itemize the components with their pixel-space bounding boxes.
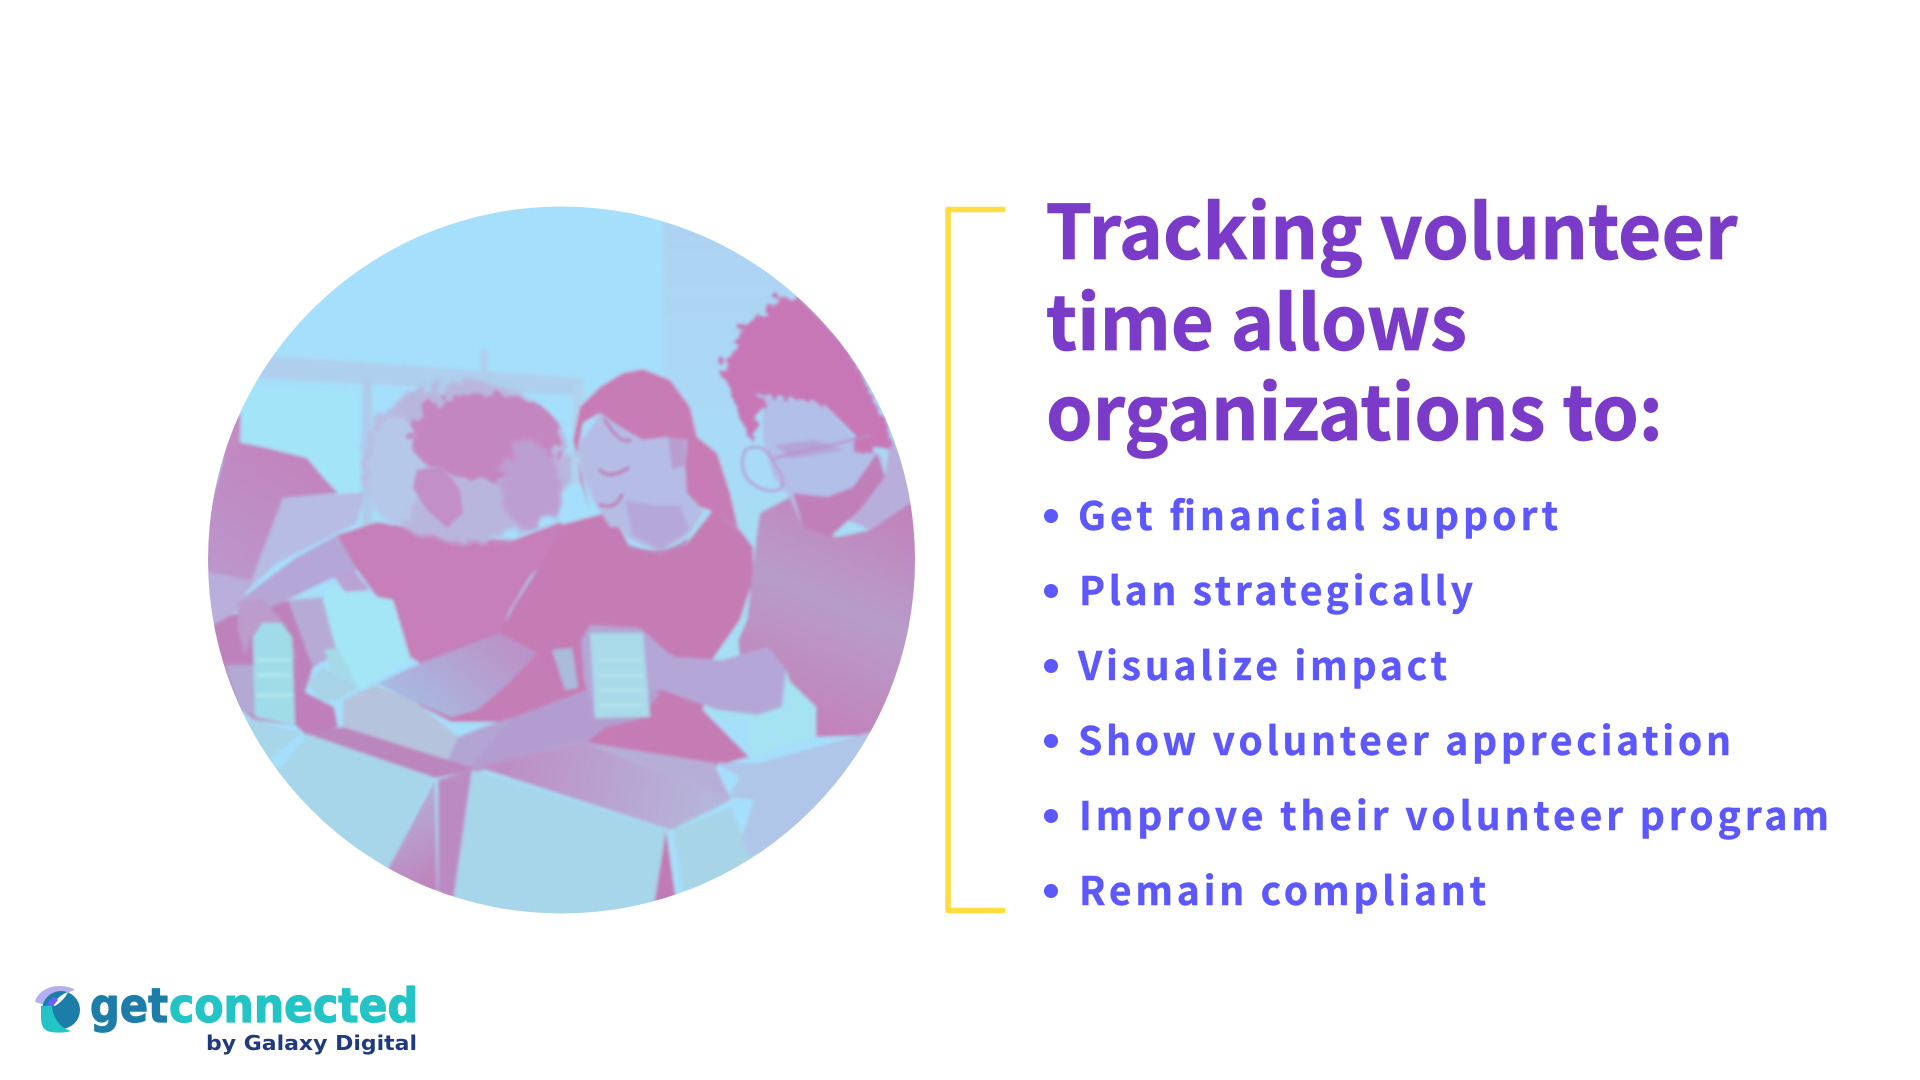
tagline: by Galaxy Digital — [206, 1031, 417, 1055]
bullet list — [1044, 486, 1829, 917]
hand on box — [715, 730, 871, 856]
item: get financial support: Get financial support — [1078, 486, 1558, 542]
logo: getconnected by Galaxy Digital — [35, 979, 418, 1055]
man right forearm — [659, 647, 788, 716]
clipboard — [248, 492, 365, 590]
heading — [1046, 172, 1738, 462]
man left shirt — [208, 441, 338, 591]
gap under arm — [552, 648, 578, 690]
woman two arms — [378, 633, 537, 717]
woman two shirt — [500, 510, 753, 767]
can ribs and glasses — [258, 420, 870, 705]
bracket — [948, 210, 1005, 910]
boxes — [246, 718, 300, 759]
far table — [225, 665, 255, 715]
window — [255, 355, 583, 396]
item: remain compliant: Remain compliant — [1079, 861, 1486, 917]
heading: organizations to: — [1046, 353, 1663, 462]
wordmark: get — [90, 979, 168, 1034]
floor behind — [322, 594, 348, 658]
man right neck and face — [848, 438, 910, 531]
woman one arm — [241, 534, 358, 606]
wordmark: connected — [169, 979, 418, 1034]
woman two hair and ponytail — [573, 369, 738, 528]
photo: volunteers packing boxes — [190, 190, 940, 930]
item: show volunteer appreciation: Show volunteer appreciation — [1078, 711, 1731, 767]
man left hand — [208, 572, 250, 626]
woman one face — [413, 466, 463, 528]
heading: Tracking volunteer — [1046, 172, 1738, 281]
man right hair — [720, 298, 893, 453]
man right beard — [793, 453, 885, 537]
item: improve their volunteer program: Improve their volunteer program — [1079, 786, 1829, 842]
woman one shirt — [337, 522, 570, 665]
item: visualize impact: Visualize impact — [1077, 636, 1447, 692]
heading: time allows — [1046, 263, 1467, 372]
photo scene — [190, 190, 940, 930]
icon: logo mark — [35, 986, 80, 1033]
plastic wrap — [308, 668, 349, 700]
woman one hair — [362, 382, 570, 542]
bottles — [253, 623, 295, 725]
woman two neck and face — [578, 413, 703, 553]
item: plan strategically: Plan strategically — [1079, 561, 1473, 617]
can — [590, 633, 650, 718]
pink behind arms — [418, 620, 569, 724]
man right shirt — [736, 496, 915, 739]
